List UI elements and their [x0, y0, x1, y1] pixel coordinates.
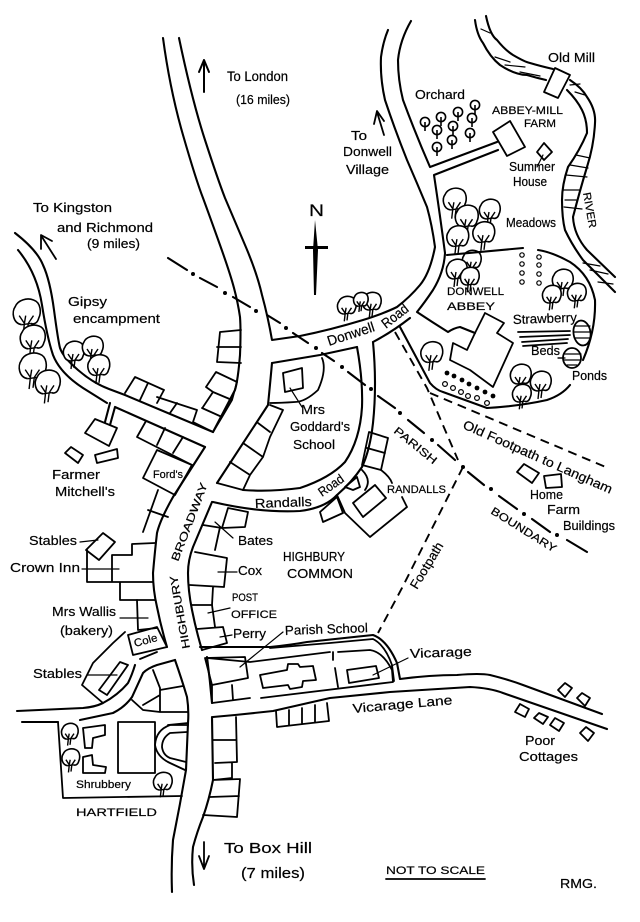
label: Goddard's: Goddard's	[290, 419, 350, 434]
label: To Kingston: To Kingston	[33, 200, 112, 215]
road: Vicarage Lane	[200, 635, 607, 729]
leader: summer house	[537, 155, 543, 167]
buildings: corner block	[132, 670, 188, 712]
building: Old Mill	[544, 68, 570, 98]
Vicarage and Parish School	[203, 464, 594, 817]
building: Parish School house	[205, 657, 250, 703]
building: stables south	[82, 632, 128, 703]
strawberry beds	[518, 331, 570, 346]
river	[475, 16, 615, 292]
label: Stables north: Stables	[29, 533, 78, 548]
label: Home: Home	[530, 487, 563, 502]
building: farmhouse	[493, 121, 525, 156]
label: Strawberry: Strawberry	[513, 310, 578, 327]
building: stables north	[86, 533, 115, 560]
label: Mrs Wallis: Mrs Wallis	[52, 604, 117, 619]
label: Cox: Cox	[238, 563, 263, 578]
label: ABBEY-MILL: ABBEY-MILL	[492, 105, 563, 117]
building row: north corner	[217, 330, 241, 363]
label: POST: POST	[232, 592, 258, 604]
orchard trees	[420, 100, 480, 156]
Randalls	[320, 432, 407, 537]
arrow: to London	[199, 60, 209, 92]
carriage drive	[155, 725, 188, 770]
label: OFFICE: OFFICE	[231, 609, 277, 621]
building: summer house	[537, 143, 552, 160]
label: Farm: Farm	[547, 502, 580, 517]
label: encampment: encampment	[73, 311, 160, 326]
footpaths	[378, 332, 608, 633]
school wall	[207, 639, 394, 698]
buildings east of Broadway	[190, 358, 324, 650]
old footpath to Langham	[430, 393, 608, 468]
label: Stables south: Stables	[33, 666, 83, 681]
row of houses	[362, 432, 388, 470]
fence: meadow edge	[447, 248, 595, 360]
house	[118, 722, 155, 773]
leader lines	[80, 358, 565, 675]
road: Randalls Road	[213, 342, 375, 511]
label: To: To	[351, 128, 367, 143]
label: Crown Inn: Crown Inn	[10, 560, 80, 575]
label: DONWELL: DONWELL	[447, 286, 504, 298]
label: House: House	[513, 174, 547, 189]
label: Meadows: Meadows	[506, 215, 556, 230]
label: Gipsy: Gipsy	[68, 294, 108, 309]
label: Randalls: Randalls	[255, 494, 313, 511]
label: RIVER: RIVER	[580, 191, 598, 229]
footpath to Vicarage	[378, 467, 463, 633]
road: Highbury Broadway east edge and Donwell Road north edge	[179, 30, 435, 340]
label: RANDALLS: RANDALLS	[387, 484, 446, 496]
building: Mrs Goddard's School	[283, 368, 303, 392]
building row: Kingston road north side	[125, 372, 237, 432]
label: Poor: Poor	[525, 733, 556, 748]
building: church	[260, 664, 316, 689]
label: BROADWAY: BROADWAY	[170, 480, 211, 563]
arrow: to Kingston	[41, 235, 56, 259]
road: Highbury Broadway west edge	[163, 38, 240, 432]
label: Vicarage Lane: Vicarage Lane	[352, 692, 453, 716]
building: Crown Inn	[87, 543, 155, 600]
label: Beds: Beds	[531, 343, 560, 358]
tree rows	[443, 253, 541, 405]
label: Summer: Summer	[509, 159, 556, 174]
label: Parish School: Parish School	[285, 620, 368, 638]
label: Footpath: Footpath	[407, 539, 446, 592]
label: Shrubbery: Shrubbery	[76, 779, 132, 791]
note text: NOT TO SCALE	[386, 865, 485, 877]
label: 9 miles: (9 miles)	[87, 236, 140, 251]
label: BOUNDARY: BOUNDARY	[488, 505, 559, 556]
label: To Box Hill: To Box Hill	[224, 840, 312, 857]
footpath branch	[395, 332, 458, 460]
river south section	[562, 80, 615, 292]
building: Mrs Wallis	[137, 600, 157, 630]
building: Cox	[190, 552, 227, 605]
label: 7 miles: (7 miles)	[241, 865, 305, 882]
river hatching	[481, 29, 613, 284]
buildings: Poor Cottages	[515, 683, 594, 741]
road: Kingston road	[15, 233, 213, 447]
Donwell Abbey grounds	[443, 248, 595, 405]
label: Mitchell's: Mitchell's	[55, 484, 116, 499]
label: Perry: Perry	[233, 626, 267, 641]
label: HIGHBURY: HIGHBURY	[168, 574, 193, 650]
building: Cole	[128, 627, 167, 659]
building: Donwell Abbey	[450, 313, 513, 387]
label: Road on Randalls Road: Road	[315, 471, 347, 499]
label: and Richmond: and Richmond	[57, 220, 153, 235]
label: COMMON: COMMON	[287, 566, 353, 581]
building row: below Ford's	[143, 490, 168, 532]
label: Donwell: Donwell	[325, 318, 377, 349]
label: PARISH: PARISH	[391, 425, 439, 467]
building: Vicarage	[347, 666, 379, 683]
outbuilding	[320, 497, 343, 522]
building row: north of Randalls Road	[217, 405, 283, 490]
building row: Kingston road south side	[137, 421, 192, 465]
buildings: row on Vicarage Lane	[276, 703, 329, 727]
arrow: to Box Hill	[199, 842, 209, 869]
label: Farmer: Farmer	[52, 467, 101, 482]
buildings: Farmer Mitchell's	[65, 419, 118, 463]
buildings: Home Farm	[517, 464, 562, 488]
direction arrows	[41, 60, 384, 869]
label: Ford's: Ford's	[153, 469, 183, 481]
label: HIGHBURY: HIGHBURY	[283, 549, 345, 564]
label: 16 miles: (16 miles)	[236, 92, 290, 107]
north arrow	[305, 201, 328, 295]
label: To London: To London	[227, 68, 288, 84]
label: HARTFIELD: HARTFIELD	[76, 807, 157, 819]
parish boundary	[168, 258, 587, 552]
note underline	[386, 878, 485, 880]
road: to Donwell Village east edge	[398, 21, 498, 333]
road: Broadway central section	[153, 363, 272, 650]
label: Cole: Cole	[133, 632, 159, 650]
label: Bates: Bates	[238, 533, 274, 548]
initials: RMG.	[560, 876, 597, 891]
road: west lane	[17, 660, 175, 722]
Abbey-Mill Farm	[420, 100, 552, 167]
road: Broadway south section	[172, 657, 213, 892]
leader: Mrs Goddard's School	[290, 388, 302, 407]
label: bakery: (bakery)	[60, 623, 113, 638]
shrubbery beds	[83, 725, 106, 773]
label: Old Mill: Old Mill	[548, 50, 595, 65]
arrow: to Donwell Village	[374, 111, 384, 135]
label: Vicarage: Vicarage	[410, 644, 472, 661]
wall	[337, 495, 407, 537]
Hartfield	[58, 722, 188, 798]
ponds	[558, 319, 592, 368]
trees	[13, 188, 586, 797]
label: Old Footpath to Langham: Old Footpath to Langham	[461, 417, 615, 497]
label: Cottages: Cottages	[519, 749, 579, 764]
river north section	[475, 16, 553, 80]
buildings: south of lane	[203, 717, 240, 817]
drive	[345, 470, 392, 490]
label: Buildings: Buildings	[563, 518, 615, 533]
fence: Mrs Goddard's School	[270, 358, 324, 403]
label: ABBEY: ABBEY	[447, 301, 496, 313]
house	[353, 485, 386, 517]
buildings west of Broadway	[65, 330, 241, 712]
label: Road on Donwell Road: Road	[378, 300, 411, 331]
label: FARM: FARM	[524, 118, 556, 130]
garden wall	[58, 722, 188, 798]
road: Donwell Road south edge	[272, 318, 570, 408]
north needle	[305, 220, 328, 295]
scale note	[386, 865, 485, 879]
label: Orchard: Orchard	[415, 87, 465, 102]
label: Mrs: Mrs	[301, 402, 326, 417]
building: Bates	[203, 508, 248, 550]
building: Ford's	[143, 450, 192, 495]
label: Village: Village	[346, 162, 389, 177]
north letter: N	[309, 201, 324, 220]
label: Ponds: Ponds	[572, 368, 607, 383]
label: Donwell: Donwell	[343, 144, 392, 159]
building: Post Office and Perry	[197, 605, 227, 650]
label: School: School	[293, 437, 335, 452]
